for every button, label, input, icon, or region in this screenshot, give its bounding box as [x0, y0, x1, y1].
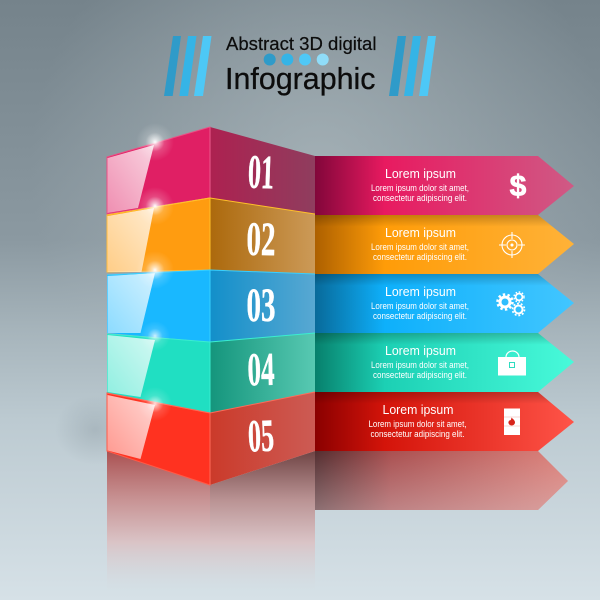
segment 4 [107, 333, 315, 413]
title line one: Abstract 3D digital [226, 34, 376, 54]
icon: briefcase [498, 351, 526, 376]
segment 3 [107, 270, 315, 342]
title dots [264, 54, 329, 66]
heading 4: Lorem ipsum [385, 343, 456, 358]
body 5: consectetur adipiscing elit. [370, 429, 464, 439]
icon: gears [498, 292, 524, 316]
number 05: 05 [247, 410, 275, 461]
icon: oil barrel [504, 408, 520, 435]
heading 1: Lorem ipsum [385, 166, 456, 181]
segment 1 [107, 127, 315, 214]
number 03: 03 [246, 279, 276, 332]
icon: target [499, 232, 525, 258]
body 1: consectetur adipiscing elit. [373, 193, 467, 203]
body 4: Lorem ipsum dolor sit amet, [371, 360, 469, 370]
heading 5: Lorem ipsum [382, 402, 454, 417]
body 1 [371, 183, 469, 203]
right stripes [389, 36, 436, 96]
body 2 [371, 242, 469, 262]
body 3: Lorem ipsum dolor sit amet, [371, 301, 469, 311]
segment 5 [107, 392, 315, 485]
body 1: Lorem ipsum dolor sit amet, [371, 183, 469, 193]
arrow 1 [315, 156, 574, 215]
arrow 4 [315, 333, 574, 392]
number 04: 04 [247, 344, 275, 396]
body 5: Lorem ipsum dolor sit amet, [368, 419, 466, 429]
reflection of the block and arrow [107, 451, 568, 592]
segment 2 [107, 198, 315, 274]
arrow 3 [315, 274, 574, 333]
left stripes [164, 36, 212, 96]
3D block [107, 123, 315, 485]
body 2: consectetur adipiscing elit. [373, 252, 467, 262]
heading 3: Lorem ipsum [385, 284, 456, 299]
number 02: 02 [246, 213, 276, 266]
heading 2: Lorem ipsum [385, 225, 456, 240]
body 2: Lorem ipsum dolor sit amet, [371, 242, 469, 252]
body 5 [368, 419, 466, 439]
body 3 [371, 301, 469, 321]
body 4: consectetur adipiscing elit. [373, 370, 467, 380]
number 01: 01 [247, 146, 275, 199]
body 4 [371, 360, 469, 380]
title block [164, 34, 436, 96]
arrow 2 [315, 215, 574, 274]
sparkles [136, 123, 174, 421]
title line two: Infographic [225, 61, 376, 96]
icon: dollar: $ [510, 170, 527, 203]
arrow 5 [315, 392, 574, 451]
body 3: consectetur adipiscing elit. [373, 311, 467, 321]
